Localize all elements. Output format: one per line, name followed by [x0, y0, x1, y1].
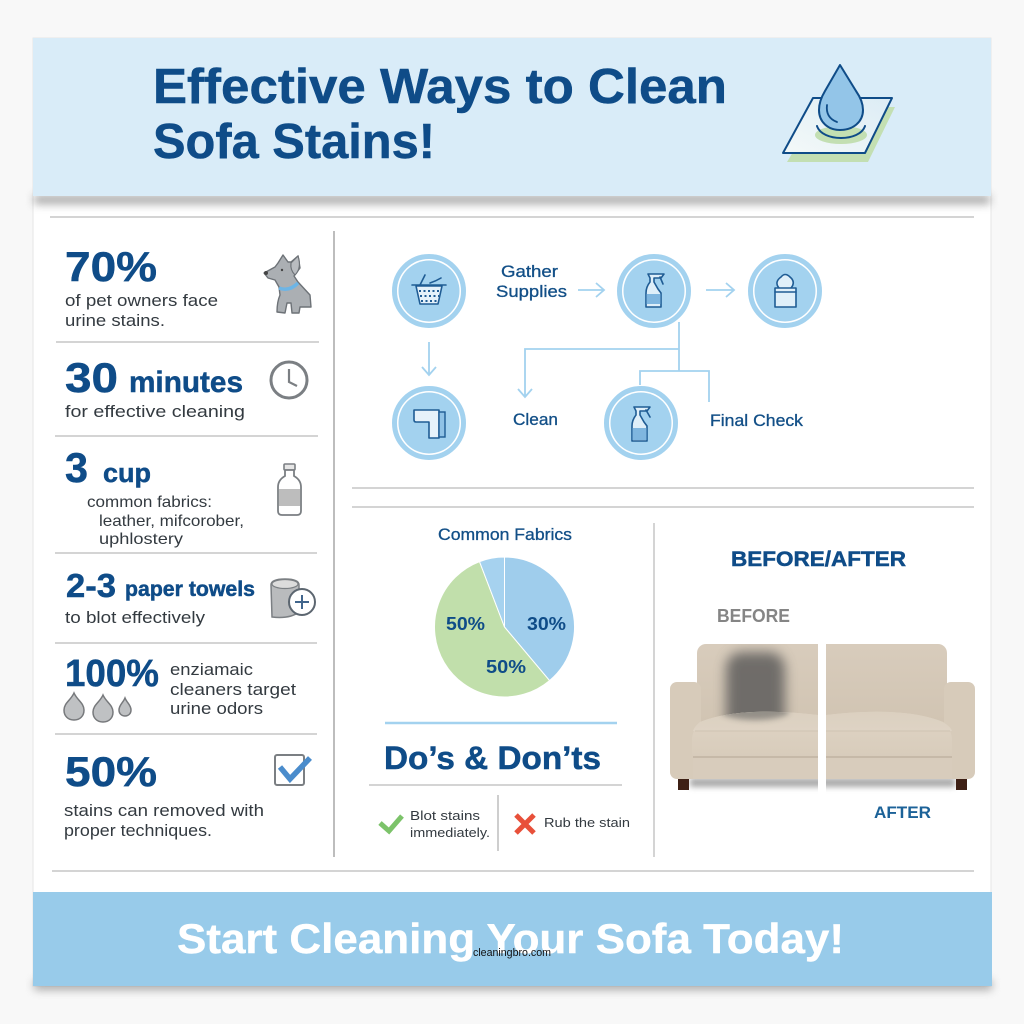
pie labels: 50%	[446, 614, 485, 634]
don't text: Rub the stain	[544, 815, 630, 830]
stat: 30 minutes: 30	[65, 354, 118, 401]
stat: 100% enzymatic cleaners: enziamaic	[170, 660, 254, 679]
step icon: wipes box	[750, 256, 820, 326]
pie labels	[446, 614, 566, 677]
stat: 50% stains removed: stains can removed with	[64, 801, 264, 820]
arrow: to spray	[578, 283, 604, 297]
stat: 2-3 paper towels: to blot effectively	[65, 608, 206, 627]
icon: green check	[380, 816, 402, 831]
stat: 50% stains removed: proper techniques.	[64, 821, 212, 840]
stat: 50% stains removed: 50%	[65, 748, 157, 795]
do text: Blot stains	[410, 808, 481, 823]
icon: three drops	[64, 693, 131, 722]
do text: immediately.	[410, 825, 490, 840]
stat: 3 cup common fabrics: leather, mifcorober,	[99, 513, 244, 530]
stat: 100% enzymatic cleaners: cleaners target	[170, 680, 296, 699]
stat: 70% pet owners: urine stains.	[65, 311, 165, 330]
stat: 50% stains removed	[64, 748, 264, 840]
chart heading: Common Fabrics	[438, 526, 572, 544]
stat: 30 minutes: minutes	[129, 366, 243, 399]
icon: dog	[264, 255, 311, 313]
label: after: AFTER	[874, 803, 931, 822]
stat: 70% pet owners: of pet owners face	[65, 291, 218, 310]
stat: 2-3 paper towels: 2-3	[66, 567, 116, 604]
heading: Do’s & Don’ts	[384, 740, 601, 776]
step icon: spray bottle 2	[606, 388, 676, 458]
pie labels: 50%	[486, 657, 526, 677]
stat: 3 cup common fabrics	[65, 444, 244, 548]
stat: 3 cup common fabrics: cup	[103, 458, 151, 488]
pie chart	[434, 557, 574, 697]
title: Sofa Stains!	[153, 115, 435, 169]
stat: 100% enzymatic cleaners: urine odors	[170, 699, 263, 718]
label: before: BEFORE	[717, 606, 790, 626]
call to action: Start Cleaning Your Sofa Today!	[177, 915, 844, 962]
icon: checkbox	[275, 755, 310, 785]
stat: 2-3 paper towels: paper towels	[125, 578, 255, 601]
icon: paper towel roll with plus	[271, 579, 315, 617]
step icon: spray bottle	[620, 256, 688, 326]
label: Clean: Clean	[513, 411, 558, 429]
step icon: towel	[394, 388, 464, 458]
label: Final Check: Final Check	[710, 412, 804, 430]
icon: bottle	[278, 464, 301, 515]
header banner	[33, 38, 991, 196]
label: Gather Supplies	[496, 263, 567, 301]
footer banner	[33, 892, 992, 986]
stat: 30 minutes	[65, 354, 245, 421]
panel: do's and don'ts	[369, 740, 630, 851]
stat: 70% pet owners: 70%	[65, 243, 157, 290]
stat: 3 cup common fabrics: 3	[65, 444, 88, 491]
watermark: cleaningbro.com	[473, 947, 551, 959]
panel: process flow	[394, 256, 820, 458]
connector lines	[518, 322, 709, 402]
stat: 70% pet owners	[65, 243, 218, 330]
panel: before and after	[670, 548, 975, 822]
icon: red cross	[516, 815, 534, 833]
panel: common fabrics pie chart	[434, 526, 574, 697]
stat: 2-3 paper towels	[65, 567, 255, 627]
stat: 100% enzymatic cleaners	[65, 653, 296, 718]
do text	[410, 808, 490, 840]
stat: 3 cup common fabrics: uphlostery	[99, 531, 183, 548]
label: Gather Supplies: Supplies	[496, 283, 567, 301]
stat: 100% enzymatic cleaners: 100%	[65, 653, 159, 695]
icon: water drop on fabric	[783, 65, 895, 162]
title	[153, 60, 727, 169]
stat: 30 minutes: for effective cleaning	[65, 402, 245, 421]
pie labels: 30%	[527, 614, 566, 634]
title: Effective Ways to Clean	[153, 60, 727, 114]
panel: key statistics	[55, 243, 319, 840]
arrow: to wipes	[706, 283, 734, 297]
arrow: down to towel	[422, 342, 436, 375]
label: Gather Supplies: Gather	[501, 263, 559, 281]
icon: clock	[271, 362, 307, 398]
sofa illustration	[670, 636, 975, 796]
stat: 3 cup common fabrics: common fabrics:	[87, 494, 212, 511]
step icon: basket	[394, 256, 464, 326]
heading: BEFORE/AFTER	[731, 548, 906, 571]
